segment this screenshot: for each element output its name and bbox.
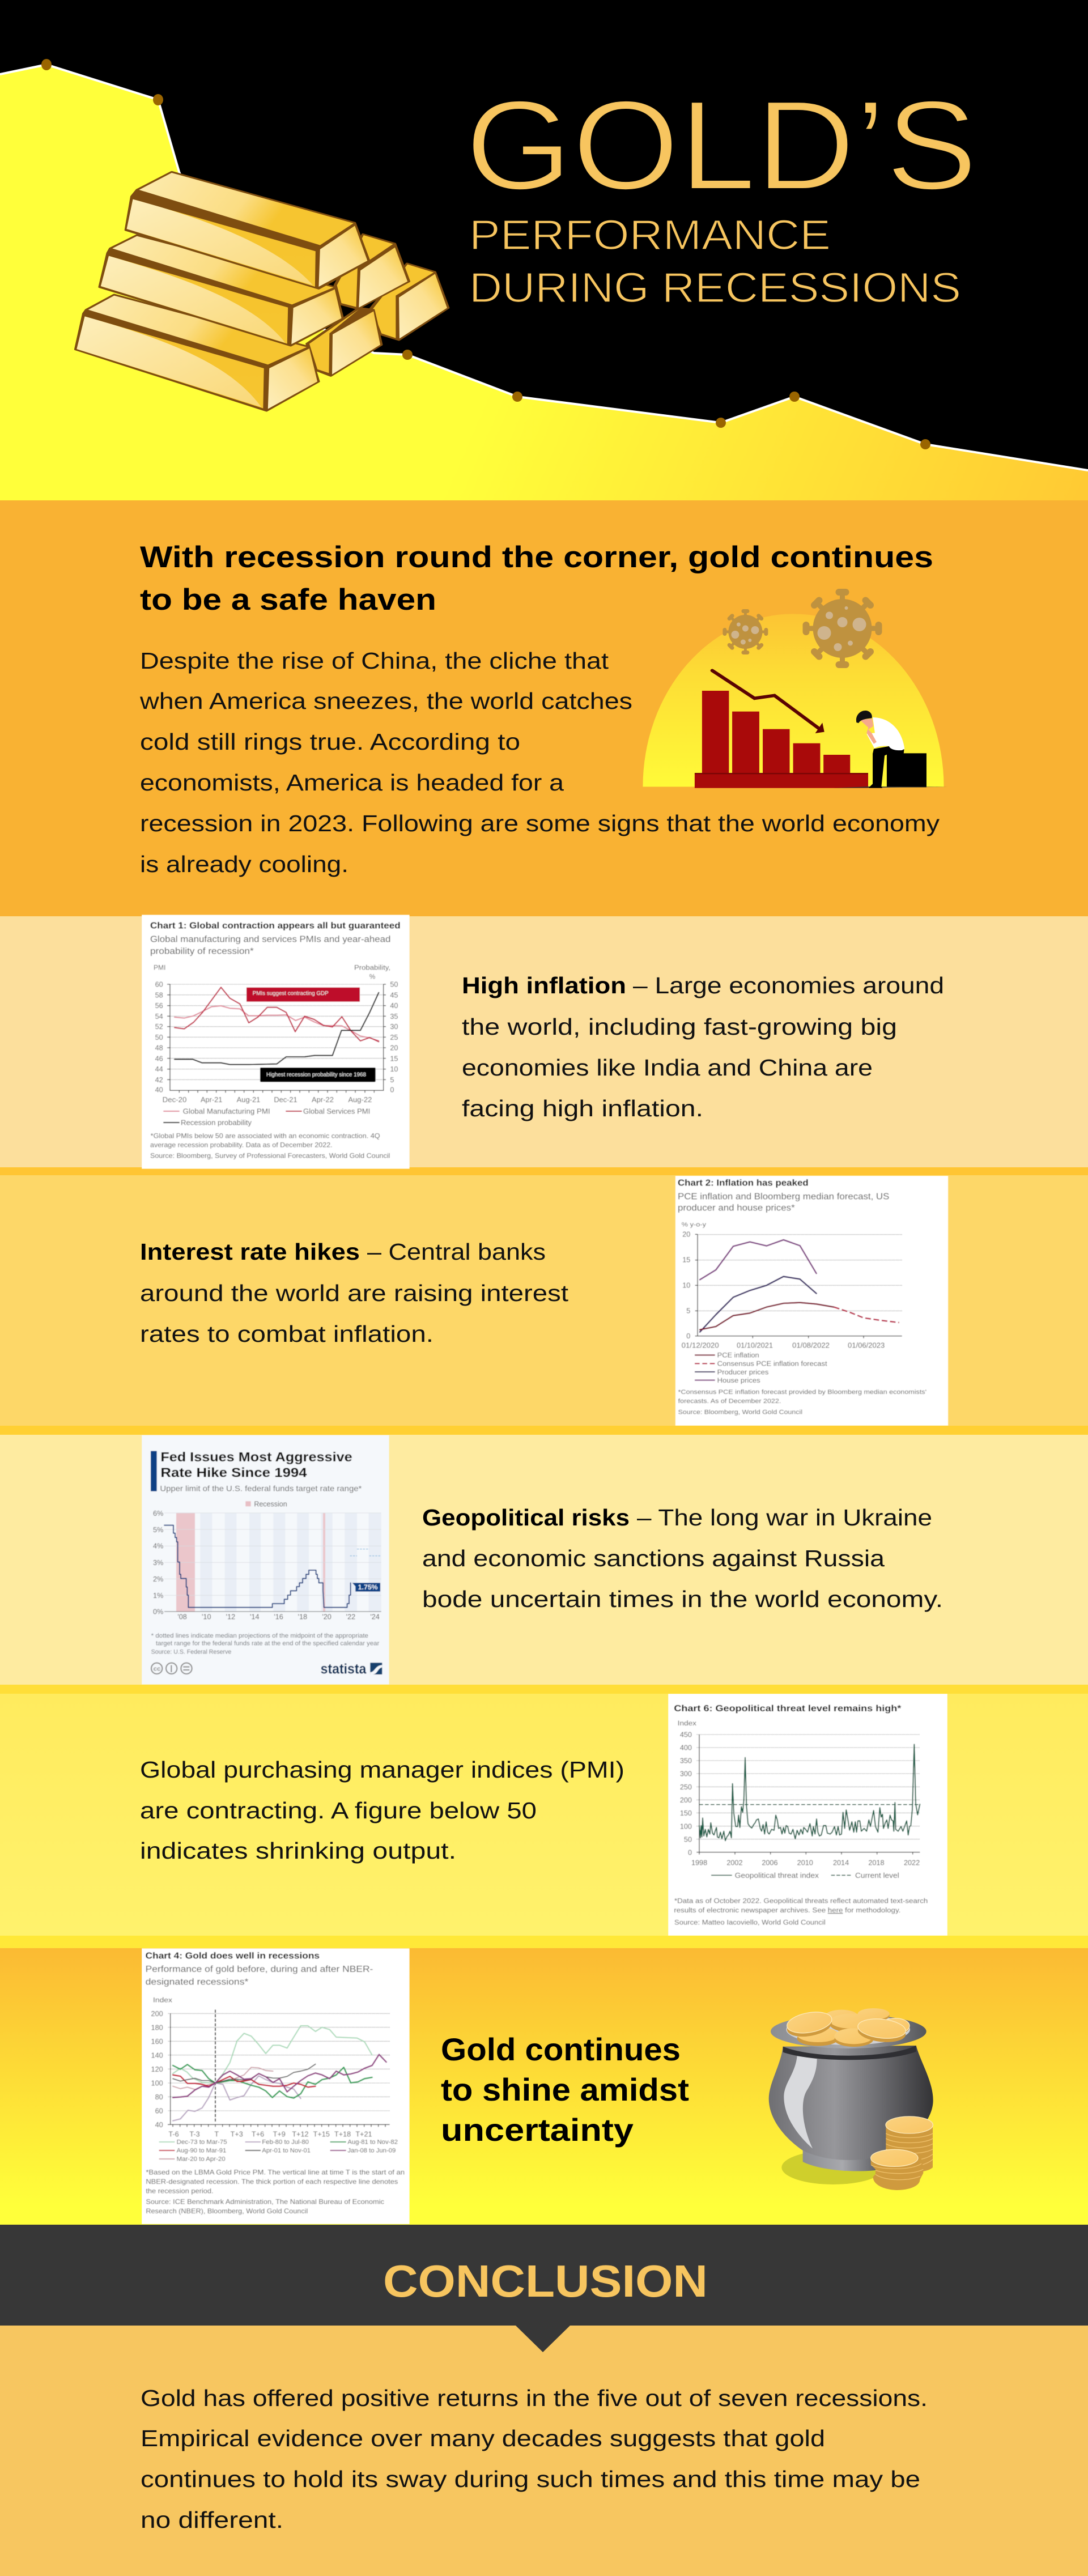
chart 4: Performance of gold before, during and after NBER- — [146, 1965, 373, 1974]
panel: conclusion — [0, 2225, 1088, 2576]
chart 6: *Data as of October 2022. Geopolitical threats reflect automated text-search — [674, 1897, 928, 1905]
chart 4: Feb-80 to Jul-80 — [262, 2139, 309, 2145]
chart 4: Dec-73 to Mar-75 — [177, 2139, 227, 2145]
chart 3: statista fed rate: * dotted lines indicate median projections of the midpoint of the appropriate — [151, 1633, 368, 1639]
chart 4: 40 — [155, 2121, 163, 2129]
chart 4: 140 — [151, 2051, 163, 2059]
x axis labels: Apr-22 — [312, 1096, 334, 1104]
interest rate text: rates to combat inflation. — [140, 1321, 434, 1347]
chart 6: 2006 — [762, 1859, 777, 1867]
chart 4 — [142, 1948, 410, 2224]
middle bar — [100, 235, 343, 346]
illustration: falling chart and worried man — [643, 614, 947, 788]
interest rate text — [140, 1239, 569, 1347]
intro text: is already cooling. — [140, 851, 348, 877]
shine heading: Gold continues — [441, 2031, 681, 2067]
geopolitical text: and economic sanctions against Russia — [422, 1545, 885, 1571]
chart 3: statista fed rate: '24 — [370, 1613, 380, 1621]
right axis labels — [390, 980, 398, 1094]
chart 2: forecasts. As of December 2022. — [678, 1398, 781, 1405]
chart 2: *Consensus PCE inflation forecast provided by Bloomberg median economists' — [678, 1389, 926, 1396]
chart 3: statista fed rate: '20 — [322, 1613, 332, 1621]
chart 3: statista fed rate: '08 — [177, 1613, 187, 1621]
chart 4: Index — [153, 1996, 172, 2004]
chart 2: Source: Bloomberg, World Gold Council — [678, 1409, 802, 1416]
chart 4: T+15 — [313, 2131, 330, 2139]
chart 3: statista fed rate: '12 — [226, 1613, 235, 1621]
chart 1: PMIs suggest contracting GDP — [253, 991, 329, 997]
intro text: recession in 2023. Following are some signs that the world economy — [140, 810, 940, 836]
chart 6: 450 — [680, 1731, 692, 1739]
conclusion banner — [0, 2225, 1088, 2352]
y axis labels: 52 — [155, 1023, 163, 1031]
intro heading — [140, 541, 933, 617]
chart 6: 250 — [680, 1783, 692, 1791]
chart 1: PMI — [154, 964, 165, 972]
right axis labels: 10 — [390, 1065, 398, 1073]
chart 6: Geopolitical threat index — [735, 1872, 819, 1880]
chart 3: statista fed rate: Rate Hike Since 1994 — [160, 1465, 307, 1480]
coin stacks — [871, 2116, 933, 2190]
PMI text: Global purchasing manager indices (PMI) — [140, 1757, 624, 1783]
chart 6: 0 — [688, 1848, 692, 1856]
chart 4: T+21 — [355, 2131, 372, 2139]
chart 2: 15 — [682, 1256, 690, 1264]
geopolitical text: – The long war in Ukraine — [637, 1504, 932, 1531]
chart 1: Source: Bloomberg, Survey of Professional Forecasters, World Gold Council — [150, 1152, 390, 1159]
chart 2: producer and house prices* — [678, 1204, 795, 1213]
chart 6: 100 — [680, 1822, 692, 1830]
chart 1: Recession probability — [181, 1119, 252, 1127]
chart 2: 01/10/2021 — [737, 1341, 773, 1349]
title — [465, 74, 978, 311]
chart 1: *Global PMIs below 50 are associated with an economic contraction. 4Q — [151, 1132, 380, 1140]
y axis labels: 42 — [155, 1076, 163, 1084]
chart 2: House prices — [717, 1376, 760, 1384]
intro text: when America sneezes, the world catches — [139, 688, 632, 714]
right axis labels: 5 — [390, 1076, 394, 1084]
chart 2: 01/06/2023 — [848, 1341, 885, 1349]
chart 2: PCE inflation and Bloomberg median forecast, US — [678, 1192, 889, 1202]
chart 4: 180 — [151, 2024, 163, 2031]
bottom bar — [75, 295, 318, 411]
right axis labels: 20 — [390, 1044, 398, 1052]
PMI text: are contracting. A figure below 50 — [140, 1797, 537, 1823]
chart 3: statista fed rate: 1.75% — [358, 1583, 378, 1591]
chart 3: statista fed rate: 6% — [153, 1510, 163, 1517]
high inflation text: High inflation — [462, 972, 626, 998]
chart 4: T-6 — [168, 2131, 179, 2139]
chart 3: statista fed rate: 1% — [153, 1592, 163, 1600]
chart 6: 2002 — [726, 1859, 742, 1867]
chart 6: Index — [678, 1719, 696, 1727]
chart 4: 120 — [151, 2065, 163, 2073]
chart 4: Jan-08 to Jun-09 — [347, 2147, 396, 2154]
intro text — [139, 648, 940, 877]
chart 3: statista fed rate: '16 — [274, 1613, 283, 1621]
intro text: cold still rings true. According to — [140, 729, 520, 755]
y axis labels: 56 — [155, 1002, 163, 1010]
chart 3: statista fed rate: Upper limit of the U.S. federal funds target rate range* — [160, 1484, 362, 1493]
chart 6: 2014 — [833, 1859, 849, 1867]
chart 2 — [675, 1176, 948, 1426]
intro text: Despite the rise of China, the cliche that — [140, 648, 609, 674]
chart 3: statista fed rate: Recession — [254, 1500, 287, 1508]
chart 4: T+6 — [252, 2131, 264, 2139]
chart 1: probability of recession* — [150, 946, 254, 956]
chart 2: 0 — [686, 1332, 690, 1340]
x axis labels: Apr-21 — [201, 1096, 222, 1104]
conclusion text: Gold has offered positive returns in the five out of seven recessions. — [141, 2385, 928, 2411]
geopolitical text — [422, 1504, 943, 1612]
chart 4: 60 — [155, 2107, 163, 2115]
right axis labels: 30 — [390, 1023, 398, 1031]
chart 4: *Based on the LBMA Gold Price PM. The vertical line at time T is the start of an — [146, 2169, 405, 2176]
chart 2: 10 — [682, 1282, 690, 1290]
intro heading: With recession round the corner, gold continues — [140, 541, 933, 574]
right axis labels: 15 — [390, 1055, 398, 1062]
chart 4: T+3 — [231, 2131, 243, 2139]
chart 6: 1998 — [691, 1859, 707, 1867]
chart 3: statista fed rate: 4% — [153, 1542, 163, 1550]
y axis labels: 50 — [155, 1034, 163, 1042]
chart 2: 20 — [682, 1231, 690, 1239]
chart 2: 01/12/2020 — [682, 1341, 719, 1349]
chart 4: Research (NBER), Bloomberg, World Gold Council — [146, 2208, 308, 2215]
high inflation text: economies like India and China are — [462, 1055, 873, 1081]
right axis labels: 0 — [390, 1086, 394, 1094]
PMI text: indicates shrinking output. — [140, 1838, 456, 1864]
chart 3: statista fed rate: '22 — [346, 1613, 355, 1621]
chart 2: 5 — [686, 1307, 690, 1315]
icon: pot of gold coins — [769, 2008, 933, 2190]
chart 2: % y-o-y — [682, 1221, 706, 1228]
icon: creative commons badges — [151, 1663, 192, 1674]
chart 1 — [142, 915, 410, 1169]
chart 1: Global Manufacturing PMI — [183, 1107, 270, 1115]
interest rate text: – Central banks — [367, 1239, 546, 1265]
chart 4: T — [214, 2131, 219, 2139]
right axis labels: 45 — [390, 991, 398, 999]
chart 3: statista fed rate: 3% — [153, 1559, 163, 1567]
high inflation text — [462, 972, 944, 1121]
panel: PMI contracting — [0, 1694, 1088, 1948]
chart 4: the recession period. — [146, 2188, 214, 2195]
x axis labels: Dec-20 — [163, 1096, 186, 1104]
chart 4: T+12 — [292, 2131, 309, 2139]
chart 6: 400 — [680, 1744, 692, 1752]
chart 6: 50 — [684, 1835, 692, 1843]
chart 4: designated recessions* — [146, 1978, 248, 1987]
x axis labels: Aug-21 — [237, 1096, 260, 1104]
shine heading: uncertainty — [441, 2112, 634, 2148]
conclusion banner: CONCLUSION — [383, 2256, 708, 2306]
chart 2: Producer prices — [717, 1368, 768, 1376]
x axis labels — [163, 1096, 372, 1104]
icon: large virus — [802, 589, 882, 668]
chart 4: 160 — [151, 2038, 163, 2046]
chart 6: 300 — [680, 1770, 692, 1778]
intro heading: to be a safe haven — [140, 583, 436, 617]
right axis labels: 50 — [390, 980, 398, 988]
chart 2: PCE inflation — [717, 1351, 759, 1359]
icon: gold bars — [75, 172, 448, 411]
icon: statista logo — [370, 1663, 382, 1674]
icon: small virus — [722, 609, 768, 654]
chart 6: Chart 6: Geopolitical threat level remains high* — [674, 1704, 902, 1714]
chart 6: 350 — [680, 1757, 692, 1765]
chart 3: statista fed rate: cc — [154, 1665, 160, 1672]
hero panel — [0, 0, 1088, 500]
y axis labels: 60 — [155, 980, 163, 988]
chart 3: statista fed rate: 5% — [153, 1526, 163, 1534]
shine heading — [441, 2031, 689, 2148]
chart 4: NBER-designated recession. The thick portion of each respective line denotes — [146, 2178, 398, 2186]
PMI text — [140, 1757, 624, 1864]
chart 6: 200 — [680, 1796, 692, 1804]
chart 3: statista fed rate — [142, 1435, 389, 1685]
chart 4: T+9 — [273, 2131, 286, 2139]
coins inside pot — [785, 2008, 910, 2047]
chart 6: 2022 — [904, 1859, 920, 1867]
y axis labels: 46 — [155, 1055, 163, 1062]
small bar right — [369, 263, 448, 340]
geopolitical text: bode uncertain times in the world economy. — [422, 1586, 943, 1612]
panel: intro — [0, 500, 1088, 916]
chart 4: Aug-81 to Nov-82 — [347, 2139, 398, 2145]
y axis labels: 44 — [155, 1065, 163, 1073]
chart 4: T-3 — [189, 2131, 200, 2139]
panel: interest rate hikes — [0, 1175, 1088, 1435]
chart 4: 200 — [151, 2010, 163, 2018]
chart 6 — [668, 1694, 947, 1936]
chart 3: statista fed rate: 2% — [153, 1575, 163, 1583]
chart 4: T+18 — [334, 2131, 351, 2139]
right axis labels: 40 — [390, 1002, 398, 1010]
title: PERFORMANCE — [469, 211, 831, 258]
panel: high inflation — [0, 915, 1088, 1175]
chart 2: Consensus PCE inflation forecast — [717, 1360, 827, 1368]
chart 4: Apr-01 to Nov-01 — [262, 2147, 311, 2154]
chart 6: 2018 — [868, 1859, 884, 1867]
chart 4: Source: ICE Benchmark Administration, The National Bureau of Economic — [146, 2198, 384, 2205]
y axis labels: 58 — [155, 991, 163, 999]
chart 3: statista fed rate: Fed Issues Most Aggressive — [160, 1449, 352, 1464]
high inflation text: – Large economies around — [633, 972, 944, 998]
y axis labels — [155, 980, 163, 1094]
y axis labels: 40 — [155, 1086, 163, 1094]
small bar upper — [335, 234, 409, 309]
right axis labels: 35 — [390, 1013, 398, 1021]
chart 2: 01/08/2022 — [792, 1341, 830, 1349]
chart 1: Highest recession probability since 1968 — [266, 1072, 366, 1078]
conclusion text — [141, 2385, 928, 2533]
chart 4: Mar-20 to Apr-20 — [177, 2156, 226, 2162]
chart 6: Current level — [855, 1872, 899, 1880]
title: DURING RECESSIONS — [469, 264, 961, 311]
small bar lower — [307, 308, 381, 376]
intro text: economists, America is headed for a — [140, 770, 564, 796]
chart data points — [41, 59, 930, 449]
panel: gold continues to shine — [0, 1948, 1088, 2225]
high inflation text: the world, including fast-growing big — [462, 1014, 897, 1040]
chart 4: 80 — [155, 2093, 163, 2101]
conclusion text: continues to hold its sway during such times and this time may be — [141, 2466, 920, 2492]
y axis labels: 48 — [155, 1044, 163, 1052]
chart 6: Source: Matteo Iacoviello, World Gold Council — [674, 1919, 826, 1927]
title: GOLD’S — [465, 74, 978, 216]
geopolitical text: Geopolitical risks — [422, 1504, 630, 1531]
chart 4: Aug-90 to Mar-91 — [177, 2147, 226, 2154]
high inflation text: facing high inflation. — [462, 1095, 703, 1121]
chart 1: average recession probability. Data as of December 2022. — [150, 1141, 333, 1149]
chart 3: statista fed rate: statista — [321, 1661, 367, 1677]
chart 3: statista fed rate: '14 — [250, 1613, 259, 1621]
shine heading: to shine amidst — [441, 2072, 689, 2107]
panel: geopolitical risks — [0, 1435, 1088, 1694]
conclusion text: Empirical evidence over many decades suggests that gold — [141, 2425, 825, 2451]
chart 1: Global Services PMI — [303, 1107, 370, 1115]
y axis labels: 54 — [155, 1013, 163, 1021]
yellow area chart — [0, 65, 1088, 500]
interest rate text: Interest rate hikes — [140, 1239, 360, 1265]
chart 3: statista fed rate: '10 — [202, 1613, 211, 1621]
chart 6: results of electronic newspaper archives. See here for methodology. — [674, 1906, 900, 1914]
chart 4: Chart 4: Gold does well in recessions — [146, 1952, 320, 1961]
interest rate text: around the world are raising interest — [140, 1280, 569, 1306]
chart 1: Chart 1: Global contraction appears all but guaranteed — [150, 921, 401, 930]
chart 6: 150 — [680, 1809, 692, 1817]
chart 3: statista fed rate: '18 — [298, 1613, 307, 1621]
chart 6: 2010 — [797, 1859, 813, 1867]
chart 1: % — [369, 972, 376, 980]
chart 4: 100 — [151, 2080, 163, 2088]
x axis labels: Dec-21 — [274, 1096, 298, 1104]
chart 3: statista fed rate: 0% — [153, 1608, 163, 1616]
chart 2: Chart 2: Inflation has peaked — [678, 1178, 809, 1188]
chart 3: statista fed rate: Source: U.S. Federal Reserve — [151, 1648, 231, 1655]
chart 1: Probability, — [354, 964, 390, 972]
x axis labels: Aug-22 — [348, 1096, 372, 1104]
conclusion text: no different. — [141, 2507, 283, 2533]
top bar — [126, 172, 369, 288]
chart 3: statista fed rate: target range for the federal funds rate at the end of the specified calendar year — [156, 1640, 380, 1647]
right axis labels: 25 — [390, 1034, 398, 1042]
chart 1: Global manufacturing and services PMIs and year-ahead — [150, 935, 390, 945]
